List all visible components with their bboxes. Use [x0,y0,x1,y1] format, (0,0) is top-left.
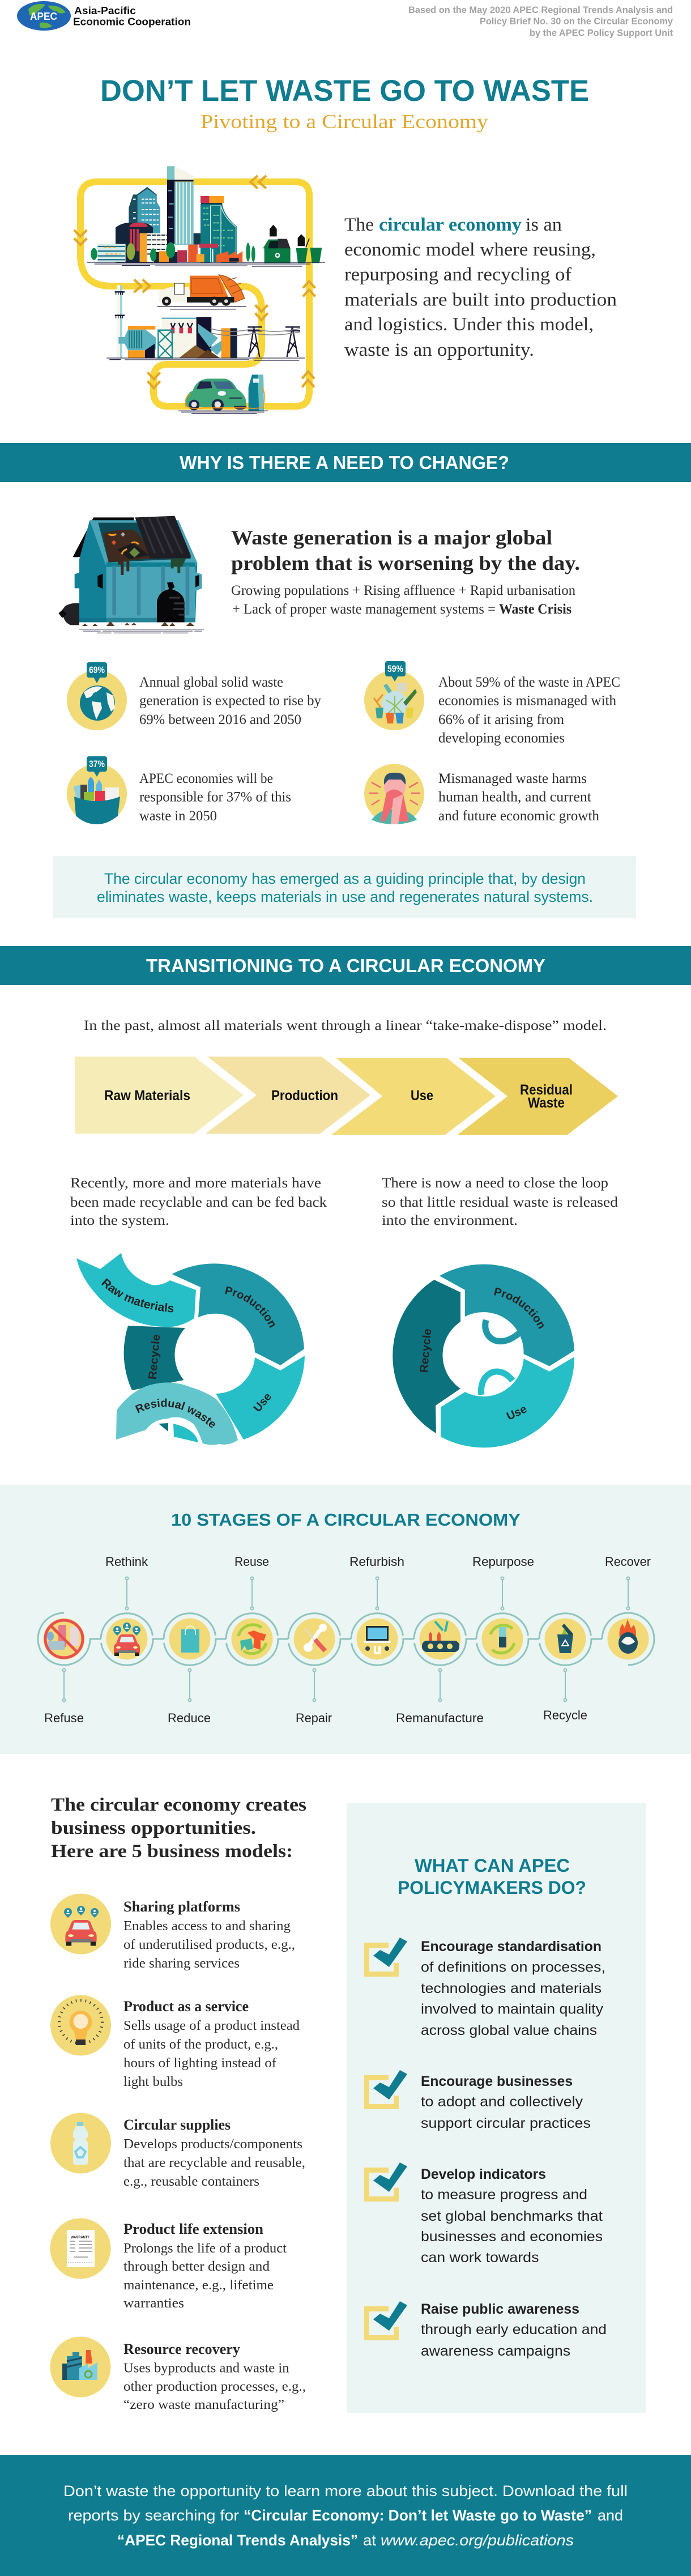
icon: waste sorting [374,683,417,723]
leader: repair [313,1669,316,1702]
stage connectors [38,1613,654,1665]
text: 59 percent: economies is mismanaged with [438,693,616,708]
item: standardisation: of definitions on processes, [421,1959,605,1975]
icon: APEC globe [17,1,71,31]
chart: partial recycling loop [76,1253,305,1445]
leader: refuse [62,1669,66,1702]
segment: production: Production [225,1286,275,1328]
text: product life extension: through better design and [123,2259,270,2274]
logo: APEC [17,1,191,31]
text: sharing platforms: of underutilised products, e.g., [123,1938,295,1952]
text: waste crisis equation [231,583,575,617]
leader: refurbish [376,1577,378,1610]
icon: globe [80,685,115,721]
text: circular supplies [123,2117,305,2189]
section band: why change: WHY IS THERE A NEED TO CHANGE? [180,452,509,473]
heading: business models: The circular economy creates [51,1795,306,1815]
chevron: production [206,1057,370,1134]
item: indicators: to measure progress and [421,2187,587,2203]
footer band: “APEC Regional Trends Analysis” [117,2532,358,2549]
leader: reuse [250,1577,254,1610]
text: resource recovery: Resource recovery [123,2341,240,2357]
text: 59 percent [438,675,620,746]
text: 37 percent: APEC economies will be [139,771,273,786]
text: linear model: In the past, almost all materials went through a linear “take-make-dispose” model. [84,1018,607,1033]
icon: checkbox [364,1938,407,1977]
label: rethink: Rethink [105,1555,148,1569]
illustration: city waste loop [74,166,325,414]
callout: 37%: 37% [89,759,105,769]
arrow: raw materials [76,1253,196,1327]
label: recycle: Recycle [543,1708,587,1722]
text: sharing platforms: ride sharing services [123,1956,240,1971]
chevron: production: Production [271,1088,338,1104]
panel: policymakers [347,1803,646,2413]
icon: APEC globe: APEC [30,11,57,22]
truck, plant and electric car [106,275,315,414]
item: standardisation: involved to maintain quality [421,2001,604,2017]
electric car [185,378,246,407]
intro text: repurposing and recycling of [344,265,571,285]
text: close the loop: into the environment. [382,1213,518,1228]
label: remanufacture: Remanufacture [396,1711,484,1725]
stage: reduce [168,1618,211,1725]
chevron: raw materials [75,1057,244,1134]
arrow: raw materials: Raw materials [101,1278,173,1312]
segment: recycle [393,1280,460,1433]
stage: refuse [43,1618,85,1725]
text: waste crisis equation: + Lack of proper waste management systems = [232,602,496,617]
leader: repurpose [501,1577,504,1610]
footer band: Don’t waste the opportunity to learn more about this subject. Download the full [63,2483,628,2500]
item: indicators: businesses and economies [421,2229,603,2245]
text: recyclable materials: been made recyclable and can be fed back [70,1195,327,1210]
text: resource recovery: “zero waste manufacturing” [123,2398,284,2412]
heading: policymakers: POLICYMAKERS DO? [398,1877,586,1898]
item: businesses [364,2070,591,2131]
text: circular supplies: Circular supplies [123,2117,231,2133]
leader: rethink [126,1577,128,1610]
stage: reuse [231,1555,273,1660]
chevron: residual waste: Waste [528,1095,565,1111]
item: public awareness [364,2301,607,2359]
text: product as a service: hours of lighting instead of [123,2056,276,2071]
item: indicators [364,2162,603,2266]
model: sharing platforms [50,1893,295,1971]
stat: 59 percent [364,661,424,730]
segment: production [172,1263,304,1365]
power plant [118,330,156,350]
item: standardisation: technologies and materials [421,1981,602,1996]
text: waste crisis equation: Waste Crisis [499,602,571,617]
section band: transitioning [0,946,691,985]
callout: 59%: 59% [387,663,403,674]
model: product life extension [50,2219,287,2311]
green dumpster and bins [263,240,291,263]
callout: guiding principle: eliminates waste, keeps materials in use and regenerates natural systems. [97,888,593,905]
label: repair: Repair [296,1711,332,1725]
text: 59 percent: 66% of it arising from [438,712,565,727]
segment: recycle: Recycle [147,1334,163,1380]
text: 59 percent: developing economies [438,731,565,746]
intro text: materials are built into production [344,290,617,310]
logo wordmark: Economic Cooperation [73,16,191,27]
label: refurbish: Refurbish [349,1555,404,1569]
lower chevrons [134,279,315,388]
item: public awareness: through early education and [421,2322,607,2337]
icon: checkbox [364,2070,407,2109]
callout: guiding principle: The circular economy has emerged as a guiding principle that, by design [104,870,586,887]
item: standardisation [364,1938,605,2038]
intro text: is an [526,215,562,235]
segment: recycle [124,1326,185,1390]
footer band: “Circular Economy: Don’t let Waste go to Waste” [244,2507,592,2524]
stage: repurpose [472,1555,534,1660]
leader: recover [626,1577,630,1610]
icon: warranty: WARRANTY [71,2236,89,2239]
intro text: The [344,215,374,235]
chevron: residual waste [458,1058,618,1135]
text: product life extension: maintenance, e.g., lifetime [123,2278,274,2293]
title: DON’T LET WASTE GO TO WASTE [100,74,589,108]
text: circular supplies: that are recyclable and reusable, [123,2156,305,2170]
text: product as a service: Product as a service [123,1998,249,2015]
text: resource recovery: other production processes, e.g., [123,2379,306,2394]
section band: why change [0,443,691,482]
source note [408,5,673,39]
city skyline [74,166,325,266]
heading: waste generation: problem that is worsening by the day. [231,552,580,574]
item: indicators: can work towards [421,2250,539,2266]
text: resource recovery: Uses byproducts and waste in [123,2361,289,2376]
text: recyclable materials: into the system. [70,1213,169,1228]
subtitle: Pivoting to a Circular Economy [201,110,489,133]
logo wordmark: Asia-Pacific [74,5,136,16]
text: 69 percent [139,675,321,727]
chevron: use [331,1058,496,1135]
text: 37 percent: responsible for 37% of this [139,790,291,804]
text: health: Mismanaged waste harms [438,771,587,786]
label: reuse: Reuse [234,1555,269,1569]
chart: closed loop [393,1264,574,1448]
leader: remanufacture [438,1669,442,1702]
text: 69 percent: 69% between 2016 and 2050 [139,712,301,727]
text: health: human health, and current [438,790,591,804]
text: product as a service: Sells usage of a product instead [123,2019,300,2033]
leader: reduce [188,1669,191,1702]
icon: warranty [50,2219,111,2279]
arrow: residual waste: Residual waste [135,1398,215,1428]
label: repurpose: Repurpose [472,1555,534,1569]
heading: 10 stages: 10 STAGES OF A CIRCULAR ECONOMY [171,1510,521,1530]
segment: use [216,1356,305,1440]
text: 69 percent: Annual global solid waste [139,675,283,690]
item: businesses: to adopt and collectively [421,2094,583,2110]
intro text: waste is an opportunity. [344,340,534,360]
source note: Based on the May 2020 APEC Regional Trends Analysis and [408,5,673,15]
text: product life extension: Prolongs the life of a product [123,2241,287,2256]
intro text: circular economy [379,215,522,235]
label: refuse: Refuse [44,1711,84,1725]
icon: bucket of plastics [74,777,120,824]
heading: business models: Here are 5 business models: [51,1841,293,1862]
chevron: use: Use [411,1088,433,1104]
panel: 10 stages [0,1485,691,1754]
text: product as a service: light bulbs [123,2075,183,2089]
model: product as a service [50,1995,300,2089]
text: product as a service: of units of the product, e.g., [123,2037,278,2052]
text: health: and future economic growth [438,808,599,824]
text: circular supplies: Develops products/components [123,2137,302,2152]
footer band: at [363,2532,376,2549]
icon: checkbox [364,2301,407,2340]
segment: recycle: Recycle [418,1328,434,1373]
ground lines [87,262,325,266]
chevron: raw materials: Raw Materials [104,1088,190,1104]
stage: recycle [543,1618,587,1722]
truck [159,287,189,302]
intro text: economic model where reusing, [344,240,596,260]
label: recover: Recover [605,1555,651,1569]
text: product life extension [123,2221,287,2311]
stat: 69 percent [67,662,127,730]
heading: business models: business opportunities. [51,1818,256,1838]
item: businesses: support circular practices [421,2115,591,2131]
stage: remanufacture [396,1618,484,1725]
segment: production: Production [494,1287,544,1329]
model: resource recovery [50,2336,306,2412]
top and left chevrons [74,176,266,245]
segment: use [441,1357,574,1447]
text: resource recovery [123,2341,306,2412]
item: businesses: Encourage businesses [421,2073,573,2089]
arrow: residual waste [116,1382,238,1445]
heading: policymakers [398,1855,586,1898]
text: recyclable materials: Recently, more and more materials have [70,1176,321,1191]
item: standardisation: across global value chains [421,2023,597,2038]
text: 69 percent: generation is expected to rise by [139,693,321,708]
text: close the loop: There is now a need to close the loop [382,1176,608,1191]
text: sharing platforms [123,1898,295,1971]
heading: waste generation: Waste generation is a major global [231,526,552,549]
item: standardisation: Encourage standardisation [421,1939,602,1955]
leader: recycle [564,1669,566,1702]
text: product life extension: Product life extension [123,2221,264,2237]
heading: policymakers: WHAT CAN APEC [415,1855,570,1876]
text: 37 percent [139,771,291,824]
logo wordmark [73,5,191,27]
item: public awareness: awareness campaigns [421,2343,570,2359]
stage: recover [605,1555,651,1660]
segment: use: Use [251,1391,274,1415]
smokestack [117,285,122,358]
chevron: residual waste: Residual [520,1082,573,1098]
stat: health icon [364,764,424,824]
footer band: reports by searching for [68,2507,239,2524]
callout: guiding principle [53,856,636,918]
stage: rethink [105,1555,148,1660]
text: 37 percent: waste in 2050 [139,808,217,824]
footer band: and [598,2507,623,2524]
yellow loop path [80,182,309,406]
stage: refurbish [349,1555,404,1660]
intro text [344,215,617,360]
icon: light bulb [50,1995,111,2055]
model: circular supplies [50,2113,305,2189]
icon: shared car [50,1893,111,1955]
icon: overflowing dumpster [58,516,204,633]
text: close the loop [382,1176,619,1228]
label: reduce: Reduce [168,1711,211,1725]
footer band [0,2455,691,2576]
item: public awareness: Raise public awareness [421,2301,579,2317]
text: health [438,771,599,824]
stage: repair [293,1618,335,1725]
segment: use: Use [505,1403,529,1423]
text: waste crisis equation: Growing populations + Rising affluence + Rapid urbanisation [231,583,575,598]
item: indicators: Develop indicators [421,2166,546,2182]
icon: checkbox [364,2162,407,2202]
heading: business models [51,1795,306,1862]
source note: Policy Brief No. 30 on the Circular Economy [480,16,673,27]
text: close the loop: so that little residual waste is released [382,1195,619,1210]
text: product as a service [123,1998,300,2089]
source note: by the APEC Policy Support Unit [530,28,673,39]
text: recyclable materials [70,1176,327,1228]
icon: bottle [50,2113,111,2173]
text: circular supplies: e.g., reusable containers [123,2174,259,2189]
stat: 37 percent [67,756,127,824]
text: 59 percent: About 59% of the waste in APEC [438,675,620,690]
callout: 69%: 69% [89,665,105,675]
item: indicators: set global benchmarks that [421,2208,603,2224]
text: sharing platforms: Enables access to and sharing [123,1919,291,1934]
transmission towers [248,327,300,357]
heading: waste generation [231,526,580,574]
icon: recycling factory [50,2336,111,2398]
text: sharing platforms: Sharing platforms [123,1898,240,1915]
intro text: and logistics. Under this model, [344,314,594,335]
section band: transitioning: TRANSITIONING TO A CIRCULAR ECONOMY [146,955,545,976]
text: product life extension: warranties [123,2296,184,2311]
footer band: www.apec.org/publications [381,2532,574,2549]
segment: production [440,1264,574,1366]
